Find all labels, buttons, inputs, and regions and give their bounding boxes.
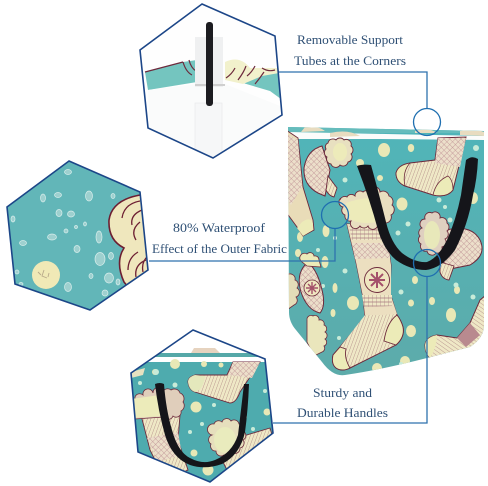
- right mitten: [207, 418, 272, 469]
- polka dots: [285, 143, 478, 373]
- scalloped fabric: [109, 193, 150, 287]
- text: waterproof: Effect of the Outer Fabric: [152, 242, 287, 256]
- mitten: lower left with snowflake: [299, 253, 324, 313]
- text: support tubes: [294, 33, 406, 68]
- text: waterproof: 80% Waterproof: [173, 221, 266, 235]
- left sock: [134, 388, 188, 472]
- callout: handles: [273, 250, 440, 423]
- sock: [188, 362, 260, 403]
- mitten: top left: [304, 138, 353, 197]
- fluff: bottom left: [307, 315, 327, 356]
- pale tube: [195, 37, 223, 87]
- basket: [280, 120, 488, 380]
- callout: support tubes: [277, 72, 440, 136]
- black rod: [206, 22, 213, 106]
- basket body: [280, 120, 488, 380]
- white corner sleeve: [195, 103, 222, 158]
- sock: large centre with snowflake: [332, 224, 403, 370]
- callout: waterproof: [149, 202, 348, 261]
- mitten: right: [418, 212, 482, 280]
- water drops: [11, 170, 120, 296]
- text: waterproof: [152, 221, 287, 256]
- text: support tubes: Tubes at the Corners: [294, 54, 406, 68]
- sock: top right: [396, 137, 466, 196]
- text: handles: Sturdy and: [313, 386, 373, 400]
- lining shading: [148, 89, 154, 90]
- sock: left edge: [286, 130, 314, 236]
- teal fabric strip: [145, 60, 280, 98]
- scalloped fabric: [225, 60, 278, 84]
- sock: bottom right: [425, 295, 488, 358]
- rim scraps: [191, 348, 220, 353]
- text: support tubes: Removable Support: [297, 33, 404, 47]
- polka dots: [152, 359, 270, 476]
- fluff: left edge: [287, 274, 299, 310]
- handle: [155, 383, 249, 467]
- handle: [357, 157, 478, 270]
- callout lines and circles: [149, 72, 440, 423]
- hexagon: support tube closeup: [135, 0, 285, 165]
- text: handles: Durable Handles: [297, 406, 388, 420]
- top rim: [288, 126, 484, 140]
- sock cuff: [339, 187, 394, 229]
- text: handles: [297, 386, 388, 420]
- hexagon: handle closeup: [130, 329, 274, 483]
- cream circle: [32, 261, 60, 289]
- hexagon: waterproof closeup: [6, 160, 149, 311]
